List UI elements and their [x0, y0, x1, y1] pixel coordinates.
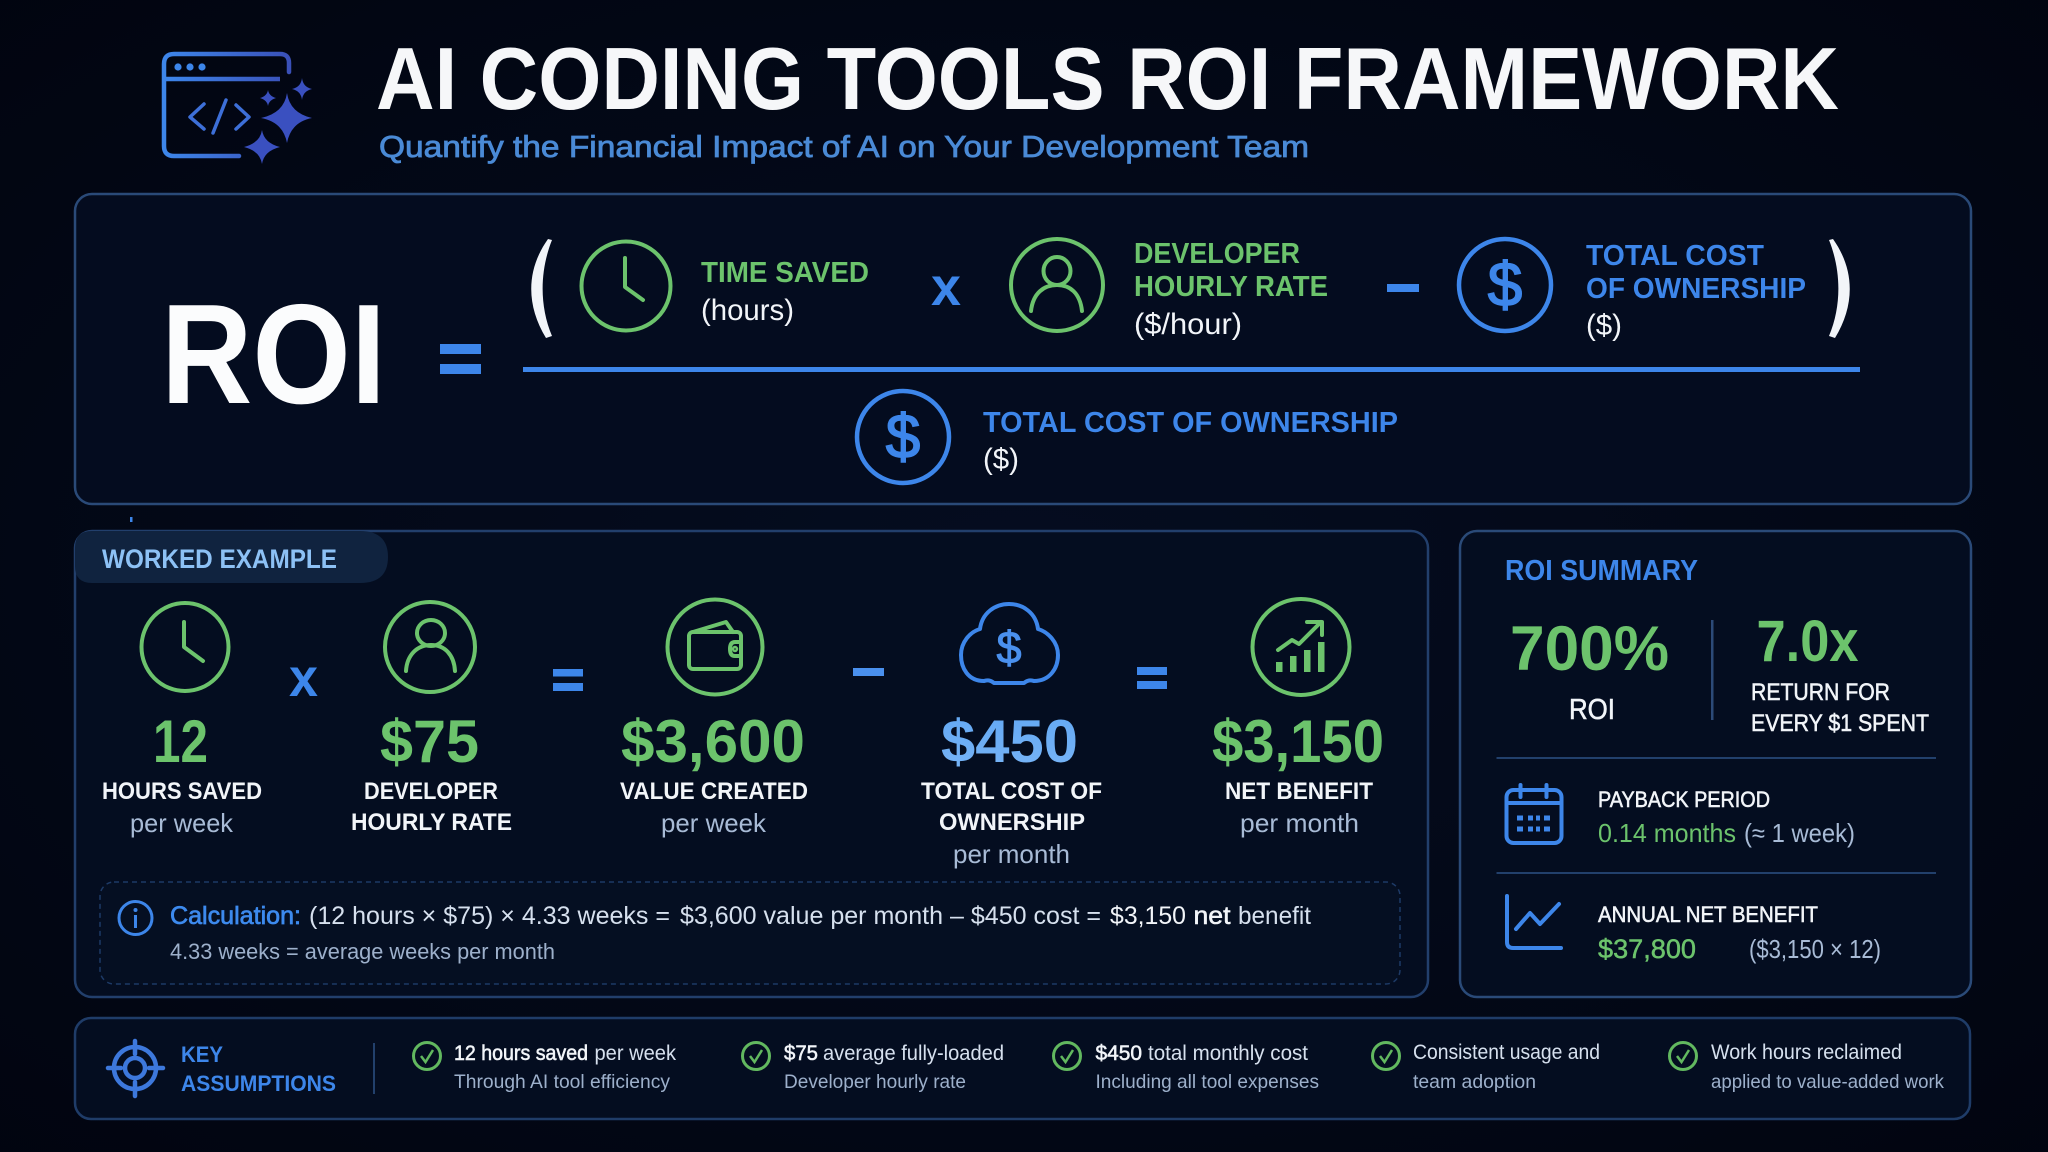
equals sign: [553, 669, 583, 691]
assumption: hours saved: Through AI tool efficiency: [454, 1071, 670, 1093]
metric: 7.0x return: 7.0x: [1756, 609, 1858, 674]
payback period: (≈ 1 week): [1744, 818, 1855, 848]
stat: $3,600 value created: [620, 708, 808, 838]
title: AI CODING TOOLS ROI FRAMEWORK: [376, 29, 1839, 128]
payback period: 0.14 months: [1598, 818, 1736, 848]
payback period: PAYBACK PERIOD: [1598, 787, 1770, 812]
multiply sign: x: [931, 257, 961, 317]
assumption: monthly cost: [1054, 1042, 1319, 1093]
stat: 12 hours saved: HOURS SAVED: [102, 778, 262, 805]
stat: $450 total cost: TOTAL COST OF: [921, 778, 1102, 805]
icon: dollar: $: [1488, 251, 1522, 320]
annual net benefit: ANNUAL NET BENEFIT: [1598, 902, 1818, 927]
denominator text: [983, 407, 1398, 476]
key assumptions heading: KEY: [181, 1042, 223, 1067]
payback period: [1598, 787, 1855, 848]
assumption: hourly rate: average fully-loaded: [823, 1042, 1004, 1065]
summary heading: ROI SUMMARY: [1505, 555, 1698, 587]
key assumptions heading: [181, 1042, 336, 1096]
icon: dollar: [1459, 239, 1551, 331]
icon: calendar: [1506, 785, 1562, 843]
stat: $3,600 value created: VALUE CREATED: [620, 778, 808, 805]
assumption: hourly rate: $75: [784, 1042, 818, 1065]
stat: 12 hours saved: [102, 708, 262, 838]
ROI label: ROI: [161, 275, 386, 434]
panel: key assumptions: [75, 1018, 1970, 1119]
minus sign: [853, 668, 884, 676]
equals sign: [1137, 667, 1167, 689]
total cost of ownership term: ($): [1586, 309, 1622, 342]
icon: cloud with dollar: [961, 604, 1058, 683]
assumption: work hours: [1670, 1041, 1944, 1093]
assumption: adoption: [1372, 1041, 1600, 1093]
stat: 12 hours saved: 12: [153, 708, 208, 775]
calculation text: (12 hours × $75) × 4.33 weeks =: [309, 902, 670, 930]
assumption: work hours: applied to value-added work: [1711, 1071, 1944, 1093]
icon: cloud with dollar: $: [996, 622, 1022, 673]
assumption: monthly cost: Including all tool expenses: [1096, 1071, 1319, 1093]
assumption: hours saved: 12 hours saved: [454, 1042, 588, 1065]
metric: 700% ROI: ROI: [1569, 694, 1615, 726]
tab: worked example: [75, 531, 388, 583]
stat: $450 total cost: $450: [941, 708, 1078, 775]
stat: $75 rate: $75: [380, 708, 479, 775]
assumption: hourly rate: [742, 1042, 1004, 1093]
developer hourly rate term: HOURLY RATE: [1134, 271, 1328, 303]
calculation text: $3,600 value per month – $450 cost =: [680, 902, 1101, 930]
assumption: monthly cost: total monthly cost: [1148, 1042, 1308, 1065]
total cost of ownership term: TOTAL COST: [1586, 240, 1764, 272]
time saved term: [701, 257, 869, 327]
assumption: adoption: team adoption: [1413, 1071, 1536, 1093]
stat: 12 hours saved: per week: [130, 808, 234, 838]
stat: $75 rate: [351, 708, 512, 836]
stat: $75 rate: DEVELOPER: [364, 778, 498, 805]
icon: growth chart: [1252, 599, 1350, 695]
icon: dollar denominator: $: [886, 403, 920, 472]
denominator text: TOTAL COST OF OWNERSHIP: [983, 407, 1398, 439]
annual net benefit: [1598, 902, 1881, 964]
minus sign: [1387, 284, 1419, 292]
metric: 7.0x return: EVERY $1 SPENT: [1751, 710, 1929, 737]
panel: ROI formula: [75, 194, 1971, 504]
total cost of ownership term: [1586, 240, 1806, 342]
stat: $3,600 value created: per week: [661, 808, 767, 838]
calculation text: $3,150: [1110, 902, 1186, 930]
stat: $3,150 net benefit: per month: [1240, 808, 1359, 838]
metric: 7.0x return: RETURN FOR: [1751, 679, 1890, 706]
tab: worked example: WORKED EXAMPLE: [102, 544, 337, 574]
icon: dollar denominator: [857, 391, 949, 483]
assumption: monthly cost: $450: [1096, 1042, 1142, 1065]
subtitle: Quantify the Financial Impact of AI on Your Development Team: [379, 129, 1309, 164]
calculation text: 4.33 weeks = average weeks per month: [170, 939, 555, 964]
icon: clock: [582, 242, 670, 330]
calculation text: Calculation:: [170, 902, 301, 930]
assumption: hourly rate: Developer hourly rate: [784, 1071, 966, 1093]
icon: wallet: [668, 600, 762, 694]
stat: $3,150 net benefit: $3,150: [1212, 708, 1384, 775]
calculation text: net: [1194, 902, 1231, 930]
annual net benefit: ($3,150 × 12): [1749, 934, 1881, 964]
panel: ROI summary: [1460, 531, 1971, 997]
icon: developer: [1011, 239, 1103, 331]
annual net benefit: $37,800: [1598, 934, 1696, 964]
callout: calculation: [100, 882, 1400, 984]
stat: $450 total cost: [921, 708, 1102, 869]
key assumptions heading: ASSUMPTIONS: [181, 1071, 336, 1096]
total cost of ownership term: OF OWNERSHIP: [1586, 273, 1806, 305]
metric: 700% ROI: 700%: [1510, 614, 1669, 684]
stat: $75 rate: HOURLY RATE: [351, 809, 512, 836]
header icon: code window with sparkles: [164, 54, 312, 164]
icon: info: [119, 902, 152, 934]
left parenthesis: [531, 239, 552, 338]
calculation text: [170, 902, 1311, 964]
developer hourly rate term: ($/hour): [1134, 308, 1242, 341]
multiply sign: x: [289, 648, 318, 708]
assumption: hours saved: [414, 1042, 676, 1093]
assumption: hours saved: per week: [594, 1042, 676, 1065]
time saved term: TIME SAVED: [701, 257, 869, 289]
right parenthesis: [1829, 239, 1850, 338]
metric: 7.0x return: [1751, 609, 1929, 737]
stat: $3,150 net benefit: NET BENEFIT: [1225, 778, 1373, 805]
fraction bar: [523, 367, 1860, 372]
metric: 700% ROI: [1510, 614, 1669, 726]
icon: target: [108, 1041, 163, 1096]
developer hourly rate term: [1134, 238, 1328, 341]
stat: $450 total cost: per month: [953, 839, 1070, 869]
stat: $3,600 value created: $3,600: [621, 708, 805, 775]
developer hourly rate term: DEVELOPER: [1134, 238, 1300, 270]
icon: clock: [142, 603, 228, 691]
icon: developer: [385, 602, 475, 692]
stat: $450 total cost: OWNERSHIP: [939, 809, 1085, 836]
denominator text: ($): [983, 443, 1019, 476]
time saved term: (hours): [701, 294, 794, 327]
stat: $3,150 net benefit: [1212, 708, 1384, 838]
equals sign: [440, 344, 481, 374]
assumption: work hours: Work hours reclaimed: [1711, 1041, 1902, 1064]
icon: line chart: [1507, 896, 1561, 948]
panel: worked example: [75, 531, 1428, 997]
assumption: adoption: Consistent usage and: [1413, 1041, 1600, 1064]
calculation text: benefit: [1238, 902, 1311, 930]
